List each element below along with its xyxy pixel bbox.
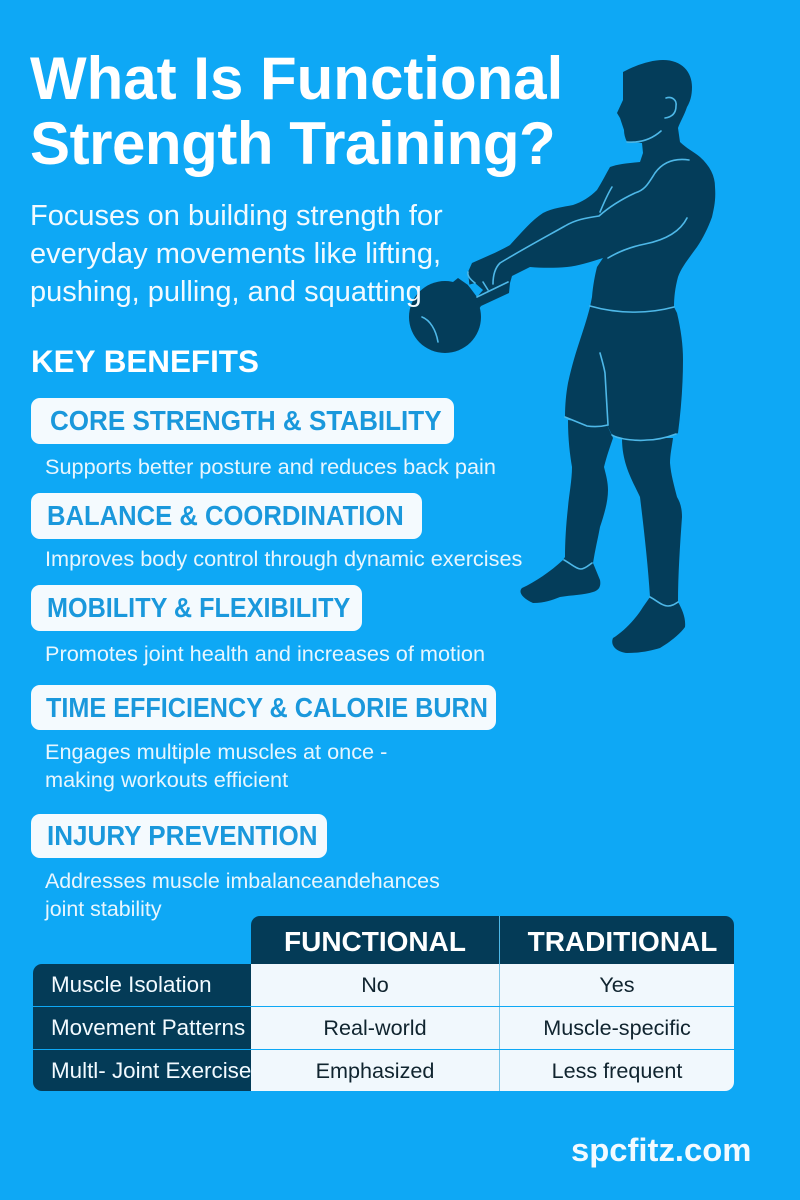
row label: multi-joint exercises bbox=[33, 1050, 251, 1091]
benefit pill: balance bbox=[31, 493, 422, 539]
row label: movement patterns bbox=[33, 1007, 251, 1049]
benefit text: injury prevention: joint stability bbox=[45, 897, 162, 921]
hand gap bbox=[468, 283, 483, 297]
intro text: Focuses on building strength for bbox=[30, 200, 443, 232]
value: no bbox=[251, 964, 499, 1006]
value: real-world: Real-world bbox=[323, 1015, 427, 1040]
value: muscle-specific bbox=[499, 1007, 734, 1049]
value: less frequent: Less frequent bbox=[552, 1058, 682, 1082]
value: less frequent bbox=[499, 1050, 734, 1091]
benefit pill: injury prevention bbox=[31, 814, 327, 858]
intro text bbox=[30, 200, 443, 308]
benefit text: core strength: Supports better posture and reduces back pain bbox=[45, 454, 496, 479]
benefit pill: balance: BALANCE & COORDINATION bbox=[47, 500, 404, 531]
heading: key benefits: KEY BENEFITS bbox=[31, 344, 259, 379]
header: functional bbox=[251, 916, 499, 964]
benefit text: injury prevention: Addresses muscle imbalanceandehances bbox=[45, 869, 440, 893]
row label: muscle isolation: Muscle Isolation bbox=[51, 972, 212, 997]
kettlebell bbox=[409, 278, 481, 353]
benefit text: injury prevention bbox=[44, 869, 440, 921]
benefit text: time efficiency: Engages multiple muscles at once - bbox=[45, 739, 387, 764]
value: emphasized bbox=[251, 1050, 499, 1091]
value: muscle-specific: Muscle-specific bbox=[543, 1015, 691, 1040]
row label: movement patterns: Movement Patterns bbox=[51, 1015, 245, 1040]
value: no: No bbox=[361, 972, 389, 997]
value: yes bbox=[499, 964, 734, 1006]
benefit pill: time efficiency bbox=[31, 685, 496, 730]
intro text: pushing, pulling, and squatting bbox=[30, 276, 422, 308]
benefit text: mobility: Promotes joint health and increases of motion bbox=[45, 641, 485, 666]
benefit pill: mobility: MOBILITY & FLEXIBILITY bbox=[47, 592, 350, 623]
muscle and clothing lines bbox=[422, 97, 689, 606]
right leg and foot bbox=[612, 438, 685, 653]
comparison table bbox=[33, 916, 734, 1091]
value: yes: Yes bbox=[599, 972, 635, 997]
row label: muscle isolation bbox=[33, 964, 251, 1006]
value: emphasized: Emphasized bbox=[316, 1058, 434, 1082]
header: traditional: TRADITIONAL bbox=[528, 926, 717, 956]
intro text: everyday movements like lifting, bbox=[30, 238, 441, 270]
body silhouette bbox=[468, 60, 715, 440]
header: traditional bbox=[499, 916, 734, 964]
title: What Is Functional bbox=[30, 45, 563, 112]
benefit text: time efficiency bbox=[45, 739, 387, 792]
benefit pill: core strength bbox=[31, 398, 454, 444]
benefit text: time efficiency: making workouts efficient bbox=[45, 767, 288, 792]
benefit text: balance: Improves body control through dynamic exercises bbox=[45, 546, 522, 571]
website footer: spcfitz.com bbox=[571, 1131, 751, 1168]
benefit pill: time efficiency: TIME EFFICIENCY & CALORIE BURN bbox=[46, 692, 488, 723]
value: real-world bbox=[251, 1007, 499, 1049]
benefit pill: mobility bbox=[31, 585, 362, 631]
title bbox=[30, 45, 563, 177]
title: Strength Training? bbox=[30, 110, 555, 177]
header: functional: FUNCTIONAL bbox=[284, 926, 466, 956]
benefit pill: injury prevention: INJURY PREVENTION bbox=[47, 820, 318, 851]
left leg and foot bbox=[520, 420, 613, 603]
benefit pill: core strength: CORE STRENGTH & STABILITY bbox=[50, 405, 442, 436]
